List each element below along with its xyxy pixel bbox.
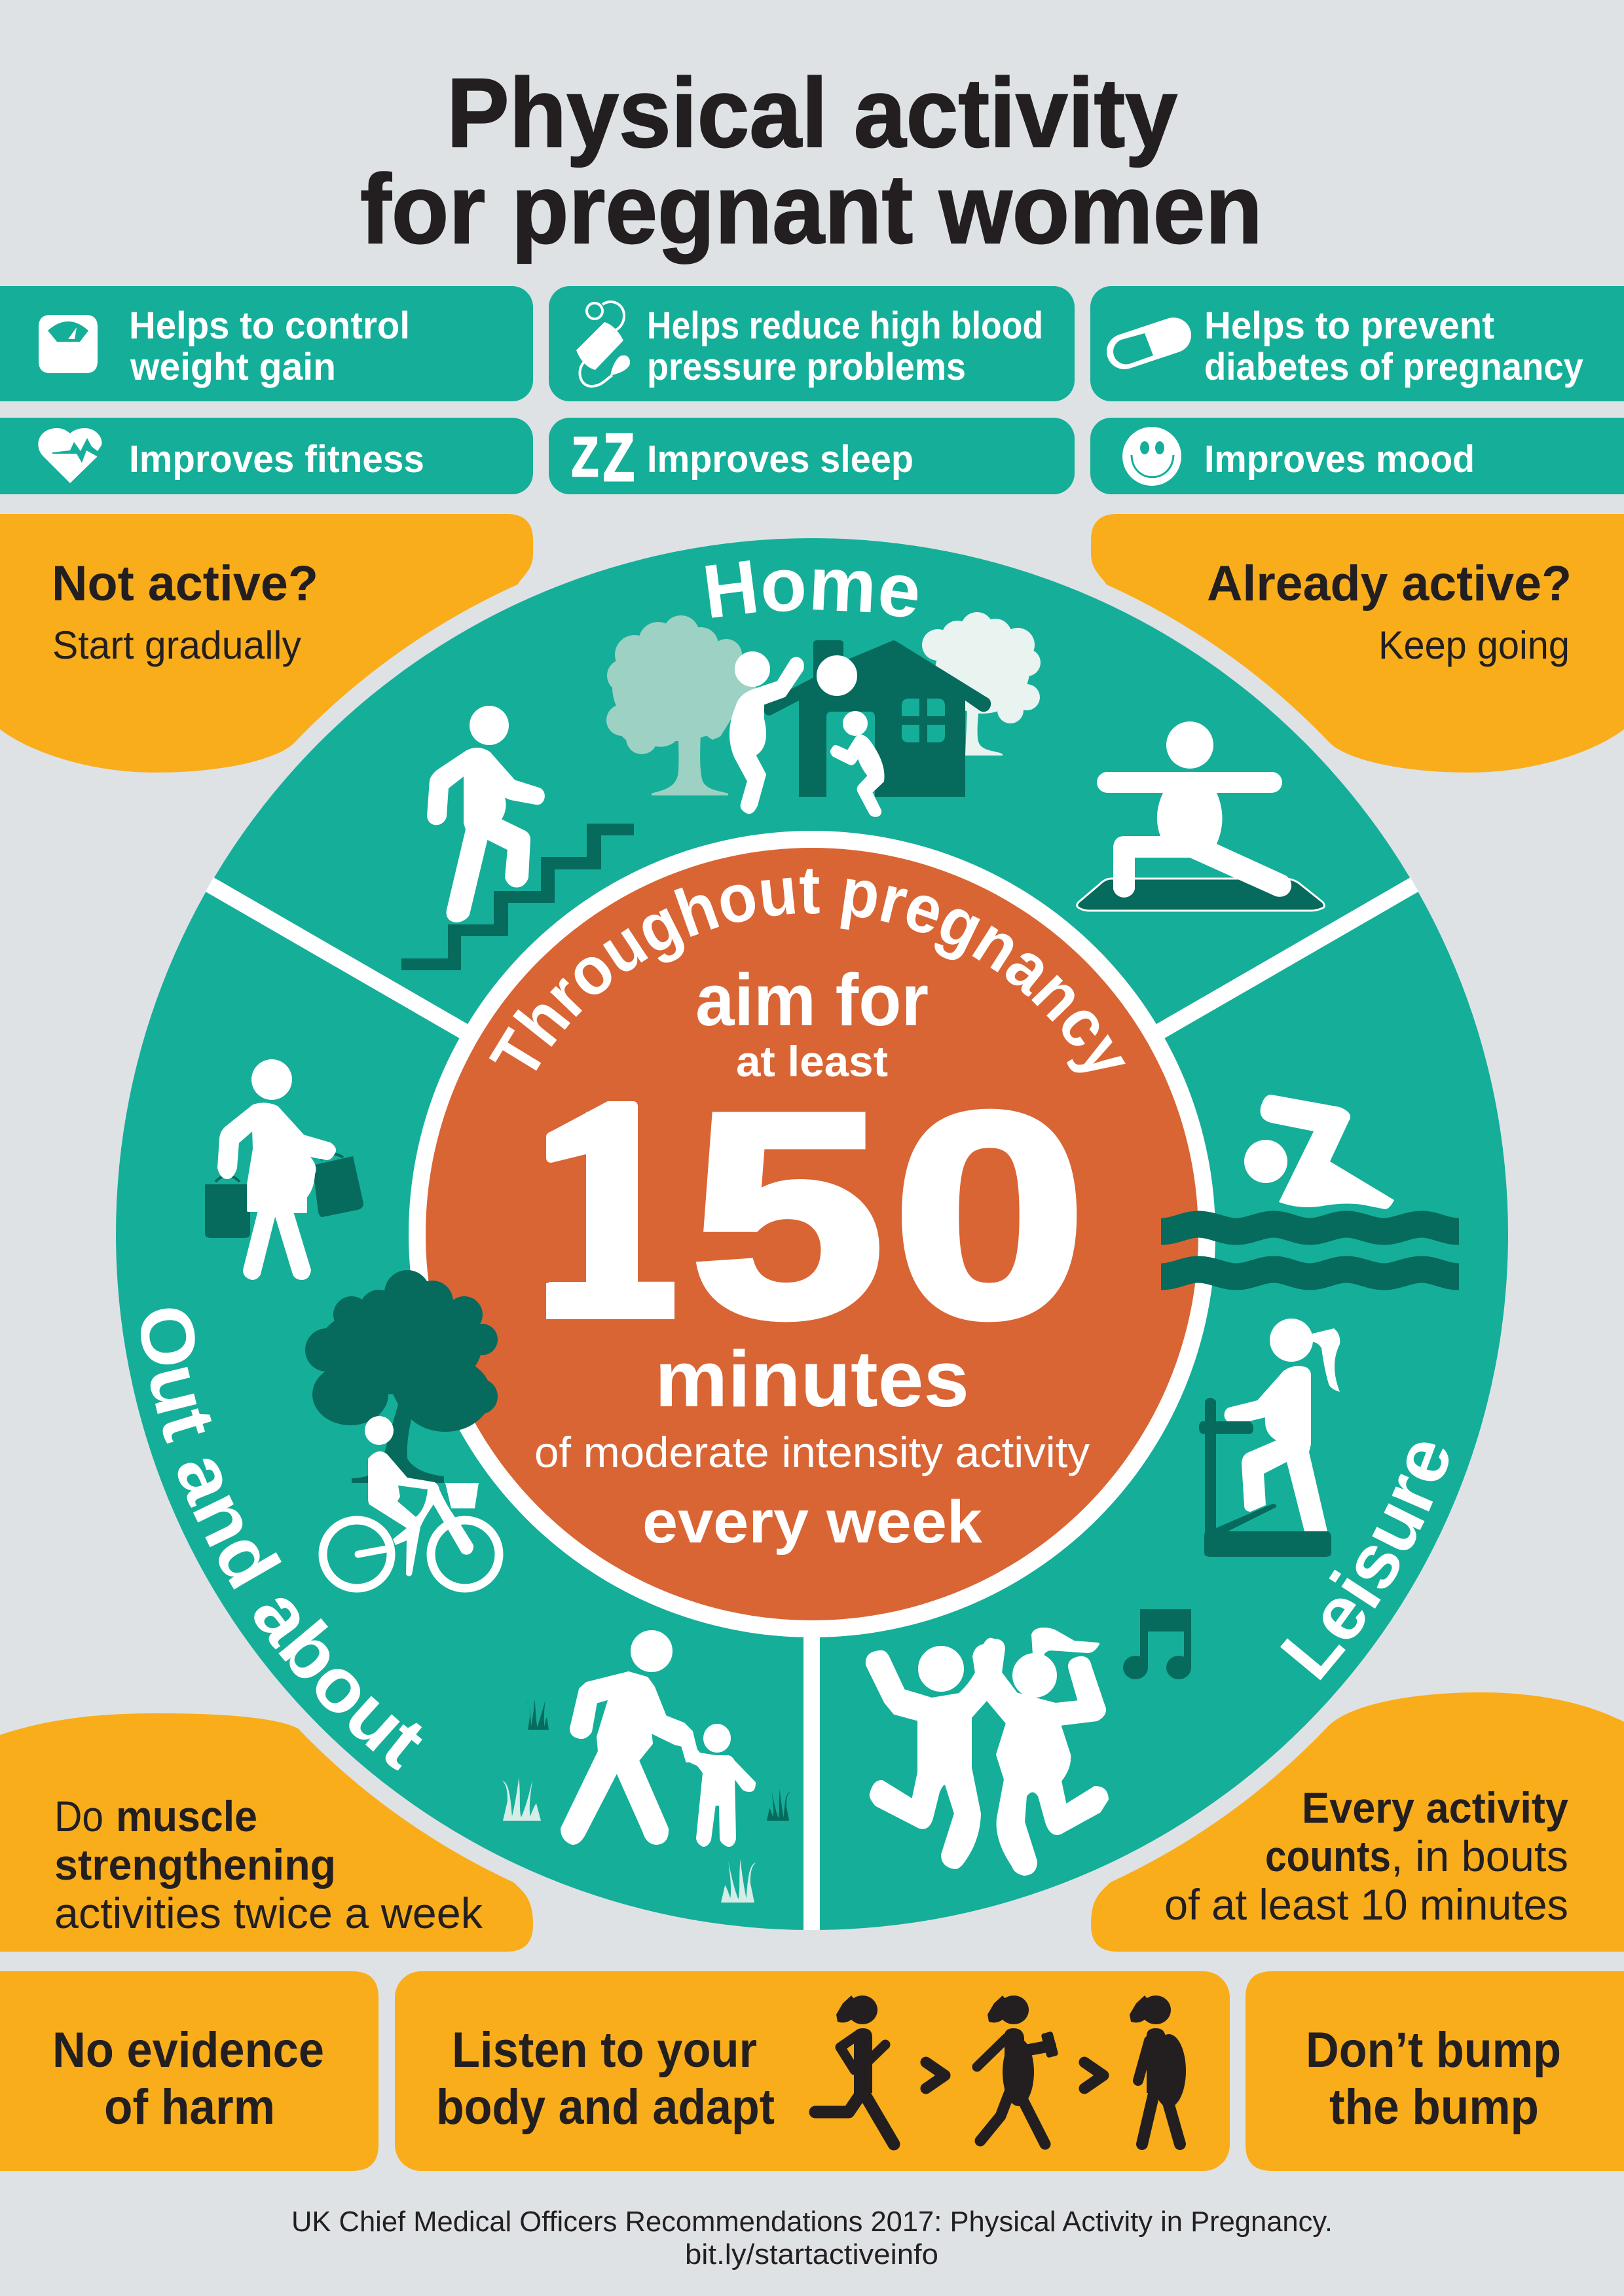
- benefit: prevent diabetes: Helps to prevent: [1204, 304, 1494, 347]
- icon: chevron: [1084, 2062, 1103, 2088]
- benefit: improves sleep: Improves sleep: [647, 438, 913, 481]
- label: Leisure: Leisure: [1280, 1442, 1449, 1680]
- activity wheel: [116, 538, 1508, 1930]
- centre message: minutes: [655, 1334, 969, 1423]
- icon: woman on treadmill: [1199, 1319, 1340, 1557]
- icon: chevron: [926, 2062, 945, 2088]
- icon: pale tree right: [922, 612, 1041, 756]
- title: [360, 58, 1263, 264]
- footer source: bit.ly/startactiveinfo: [685, 2238, 938, 2270]
- centre message: at least: [736, 1037, 888, 1085]
- panel: listen to your body: [395, 1971, 1230, 2171]
- benefit: improves mood: [1090, 418, 1624, 494]
- callout: already active: Already active?: [1207, 556, 1572, 611]
- title: Physical activity: [447, 58, 1177, 168]
- benefit: prevent diabetes: diabetes of pregnancy: [1204, 346, 1583, 388]
- panel: benefits: [0, 286, 1624, 495]
- callout: muscle strengthening: Do: [54, 1792, 103, 1840]
- panel: don't bump the bump: Don’t bump: [1306, 2022, 1561, 2078]
- benefit: improves fitness: [0, 418, 533, 494]
- benefit: control weight gain: weight gain: [130, 346, 336, 388]
- icon: home scene: [606, 612, 1041, 816]
- icon: standing figure: [1130, 1995, 1186, 2144]
- panel: no evidence of harm: [0, 1971, 378, 2171]
- panel: listen to your body: Listen to your: [452, 2022, 757, 2078]
- callout: not active: Not active?: [52, 556, 318, 611]
- icon: cyclist under tree: [305, 1270, 499, 1588]
- centre message: aim for: [695, 959, 929, 1041]
- icon: music notes: [1123, 1609, 1191, 1679]
- icon: yoga on mat: [1077, 721, 1324, 911]
- benefit: improves sleep: Z: [572, 426, 599, 488]
- icon: dark tree: [305, 1270, 498, 1483]
- footer source: [291, 2206, 1333, 2270]
- icon: walker on stairs: [401, 706, 634, 970]
- label: Home: Home: [705, 560, 917, 618]
- benefit: blood pressure: [549, 286, 1075, 401]
- callout: every activity counts: , in bouts: [1391, 1832, 1568, 1880]
- benefit: control weight gain: [0, 286, 533, 401]
- benefit: prevent diabetes: [1090, 286, 1624, 401]
- benefit: improves fitness: Improves fitness: [129, 438, 424, 481]
- centre message: of moderate intensity activity: [534, 1428, 1090, 1476]
- icon: adult and child figures: [731, 653, 883, 816]
- icon: cyclist and bike: [323, 1416, 499, 1588]
- callout: every activity counts: Every activity: [1302, 1783, 1568, 1832]
- title: for pregnant women: [360, 154, 1263, 264]
- icon: runner: [815, 1995, 894, 2144]
- icon: light tree left: [606, 615, 756, 795]
- callout: already active: Keep going: [1378, 623, 1570, 667]
- icon: swimmer and waves: [1161, 1095, 1459, 1277]
- panel: don't bump the bump: [1246, 1971, 1624, 2171]
- icon: house: [763, 640, 991, 797]
- callout: every activity counts: [1091, 1692, 1624, 1952]
- panel: don't bump the bump: the bump: [1329, 2079, 1539, 2135]
- panel: no evidence of harm: of harm: [104, 2079, 275, 2135]
- panel: listen to your body: body and adapt: [436, 2079, 775, 2135]
- benefit: control weight gain: Helps to control: [129, 304, 410, 347]
- label: Throughout pregnancy: Throughout pregnancy: [489, 869, 1126, 1072]
- callout: every activity counts: of at least 10 minutes: [1164, 1880, 1568, 1929]
- callout: not active: [0, 514, 533, 773]
- icon: dancing couple: [867, 1629, 1107, 1874]
- benefit: improves mood: Improves mood: [1204, 438, 1475, 481]
- footer source: UK Chief Medical Officers Recommendations 2017: Physical Activity in Pregnancy.: [291, 2206, 1333, 2238]
- panel: no evidence of harm: No evidence: [52, 2022, 324, 2078]
- label: Out and about: Out and about: [140, 1308, 422, 1770]
- icon: grass tufts: [502, 1699, 790, 1903]
- callout: muscle strengthening: strengthening: [54, 1840, 336, 1889]
- callout: muscle strengthening: [0, 1713, 533, 1952]
- benefit: improves sleep: Z: [603, 420, 635, 495]
- callout: muscle strengthening: muscle: [116, 1792, 257, 1840]
- callout: not active: Start gradually: [52, 623, 301, 667]
- callout: every activity counts: counts: [1265, 1832, 1391, 1880]
- callout: already active: [1091, 514, 1624, 773]
- centre message: every week: [642, 1489, 983, 1556]
- icon: man walking with child: [562, 1631, 754, 1846]
- benefit: blood pressure: Helps reduce high blood: [647, 304, 1043, 347]
- centre message: [502, 959, 1090, 1556]
- number: 150: 150: [502, 1053, 1086, 1377]
- benefit: blood pressure: pressure problems: [647, 346, 966, 388]
- callout: muscle strengthening: activities twice a week: [54, 1889, 483, 1937]
- benefit: improves sleep: [549, 418, 1075, 495]
- centre circle: [426, 848, 1198, 1620]
- icon: walker with bottle: [977, 1995, 1059, 2144]
- icon: shopper with bags: [205, 1059, 363, 1279]
